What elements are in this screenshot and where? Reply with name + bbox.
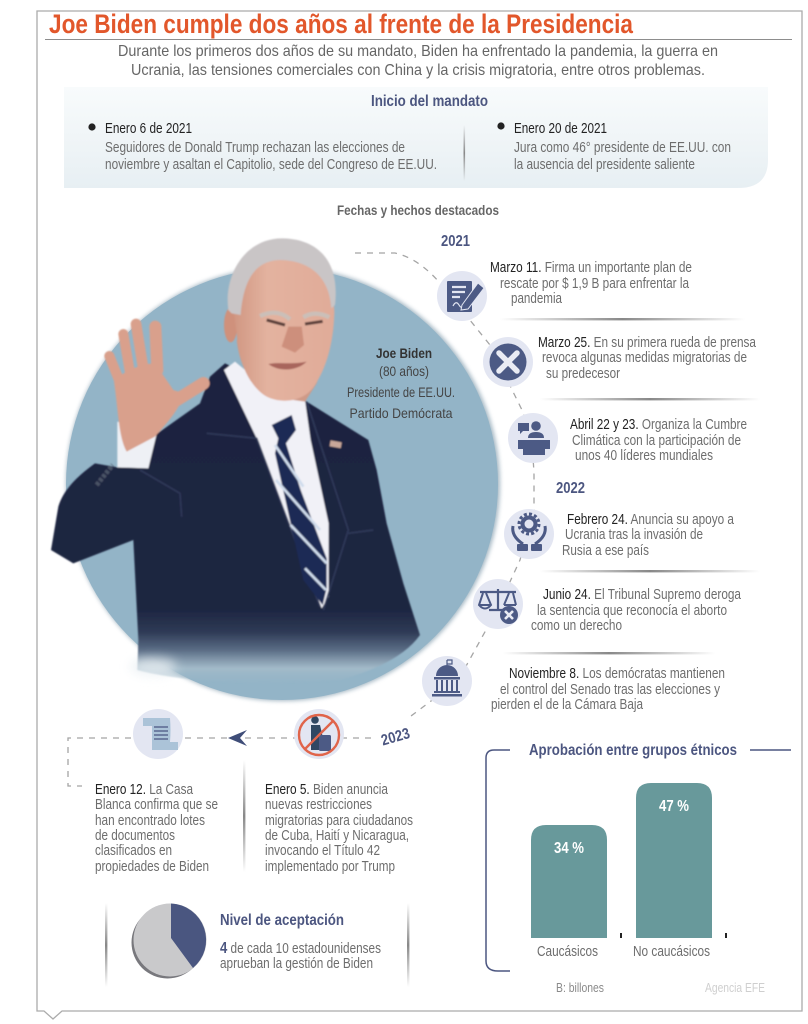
event: noviembre 8	[422, 656, 725, 713]
soft bottom-left fade	[130, 658, 177, 675]
event: marzo 11	[437, 260, 692, 321]
year 2023: 2023	[379, 725, 412, 750]
event: abril 22 y 23: Abril 22 y 23. Organiza la Cumbre	[570, 417, 747, 433]
event: abril 22 y 23: Climática con la participación de	[572, 433, 741, 449]
shirt	[224, 362, 329, 608]
event: enero 6	[88, 121, 437, 173]
event: junio 24: la sentencia que reconocía el aborto	[537, 603, 727, 619]
panel heading: Inicio del mandato	[371, 93, 488, 110]
icon: scroll document	[133, 709, 183, 759]
event: noviembre 8: Noviembre 8. Los demócratas mantienen	[509, 666, 725, 682]
biography text: Joe Biden	[376, 346, 432, 361]
suit	[51, 363, 420, 683]
event: enero 5: implementado por Trump	[265, 859, 395, 875]
hair	[228, 238, 336, 315]
biography text: Partido Demócrata	[350, 405, 453, 421]
year 2022: 2022	[556, 480, 585, 497]
event: enero 5: invocando el Título 42	[265, 843, 380, 859]
neck	[237, 330, 333, 402]
lapel lines	[140, 402, 373, 610]
icon: speaker at podium	[508, 413, 558, 463]
event: marzo 25: Marzo 25. En su primera rueda de prensa	[538, 335, 756, 351]
flag pin	[330, 440, 342, 448]
cuff	[117, 422, 157, 468]
intro text: Durante los primeros dos años de su mandato, Biden ha enfrentado la pandemia, la guerra en	[118, 43, 718, 60]
biography text: (80 años)	[379, 363, 429, 379]
event: enero 6: noviembre y asaltan el Capitolio, sede del Congreso de EE.UU.	[105, 157, 437, 173]
event: enero 20: Jura como 46° presidente de EE.UU. con	[514, 140, 731, 156]
icon: cross	[483, 337, 533, 387]
title: Joe Biden cumple dos años al frente de la Presidencia	[49, 9, 634, 39]
icon: no entry with traveller	[294, 709, 344, 759]
event: enero 20	[497, 121, 731, 173]
tie	[272, 415, 327, 605]
event: febrero 24: Febrero 24. Anuncia su apoyo a	[567, 512, 734, 528]
event: marzo 11: pandemia	[511, 291, 562, 307]
event: marzo 25: su predecesor	[546, 366, 620, 382]
event: enero 6: Enero 6 de 2021	[105, 121, 192, 137]
bar chart	[531, 783, 727, 960]
icon: hands and gear	[504, 509, 554, 559]
event: enero 12: clasificados en	[95, 843, 172, 859]
bar chart: 47 %	[659, 798, 689, 815]
event: enero 5: Enero 5. Biden anuncia	[265, 782, 388, 798]
event: enero 12: Blanca confirma que se	[95, 797, 218, 813]
blue portrait circle	[66, 267, 500, 701]
portrait: Joe Biden waving	[51, 238, 420, 683]
event: noviembre 8: el control del Senado tras las elecciones y	[500, 682, 721, 698]
panel: nivel de aceptación: 4 de cada 10 estadounidenses	[220, 940, 381, 957]
event: enero 12: han encontrado lotes	[95, 813, 205, 829]
event: enero 12: propiedades de Biden	[95, 859, 209, 875]
intro text	[118, 43, 718, 79]
event: febrero 24: Ucrania tras la invasión de	[565, 527, 703, 543]
panel: nivel de aceptación: Nivel de aceptación	[220, 912, 344, 929]
timeline dashed path	[68, 253, 534, 786]
event: marzo 11: rescate por $ 1,9 B para enfrentar la	[500, 276, 689, 292]
event: enero 12: Enero 12. La Casa	[95, 782, 193, 798]
event: junio 24	[473, 579, 741, 634]
icon: signing document	[437, 271, 487, 321]
bar chart: 34 %	[554, 840, 584, 857]
brows, eyes and mouth	[260, 313, 329, 319]
event: marzo 25	[483, 335, 756, 387]
bar chart: Caucásicos	[537, 944, 598, 960]
arrow	[228, 730, 247, 746]
ear	[224, 308, 237, 342]
year 2021: 2021	[441, 233, 470, 250]
event: enero 5: nuevas restricciones	[265, 797, 372, 813]
icon: scales with cross	[473, 579, 523, 629]
event: abril 22 y 23	[508, 413, 747, 464]
event: enero 20: la ausencia del presidente saliente	[514, 157, 695, 173]
event: enero 20: Enero 20 de 2021	[514, 121, 607, 137]
panel: nivel de aceptación	[105, 903, 409, 987]
note: billones: B: billones	[556, 980, 604, 995]
event: enero 12	[95, 782, 218, 875]
event: abril 22 y 23: unos 40 líderes mundiales	[575, 448, 713, 464]
event: enero 5: de Cuba, Haití y Nicaragua,	[265, 828, 409, 844]
chart heading: Aprobación entre grupos étnicos	[529, 742, 737, 759]
event: febrero 24: Rusia a ese país	[562, 543, 649, 559]
panel: inicio del mandato	[64, 87, 768, 188]
event: enero 6: Seguidores de Donald Trump rechazan las elecciones de	[105, 140, 405, 156]
face	[232, 255, 334, 401]
event: junio 24: como un derecho	[531, 618, 622, 634]
panel: nivel de aceptación: aprueban la gestión de Biden	[220, 956, 373, 972]
event: marzo 25: revoca algunas medidas migratorias de	[542, 350, 747, 366]
event: marzo 11: Marzo 11. Firma un importante plan de	[490, 260, 692, 276]
intro text: Ucrania, las tensiones comerciales con China y la crisis migratoria, entre otros problemas.	[131, 62, 705, 79]
biography text: Presidente de EE.UU.	[347, 384, 455, 400]
sleeve detail	[97, 465, 113, 485]
biography text	[347, 346, 455, 421]
event: febrero 24	[504, 509, 734, 559]
section heading: fechas y hechos: Fechas y hechos destacados	[337, 203, 499, 218]
icon: capitol building	[422, 656, 472, 706]
panel: aprobación entre grupos étnicos	[486, 742, 791, 971]
hand	[109, 324, 203, 400]
bar chart: No caucásicos	[633, 944, 710, 960]
event: junio 24: Junio 24. El Tribunal Supremo deroga	[543, 587, 741, 603]
event: enero 5	[265, 782, 413, 875]
event: noviembre 8: pierden el de la Cámara Baja	[491, 697, 643, 713]
event: enero 12: de documentos	[95, 828, 175, 844]
pie chart	[132, 904, 206, 978]
event: enero 5: migratorias para ciudadanos	[265, 813, 413, 829]
source credit: Agencia EFE	[705, 980, 765, 995]
